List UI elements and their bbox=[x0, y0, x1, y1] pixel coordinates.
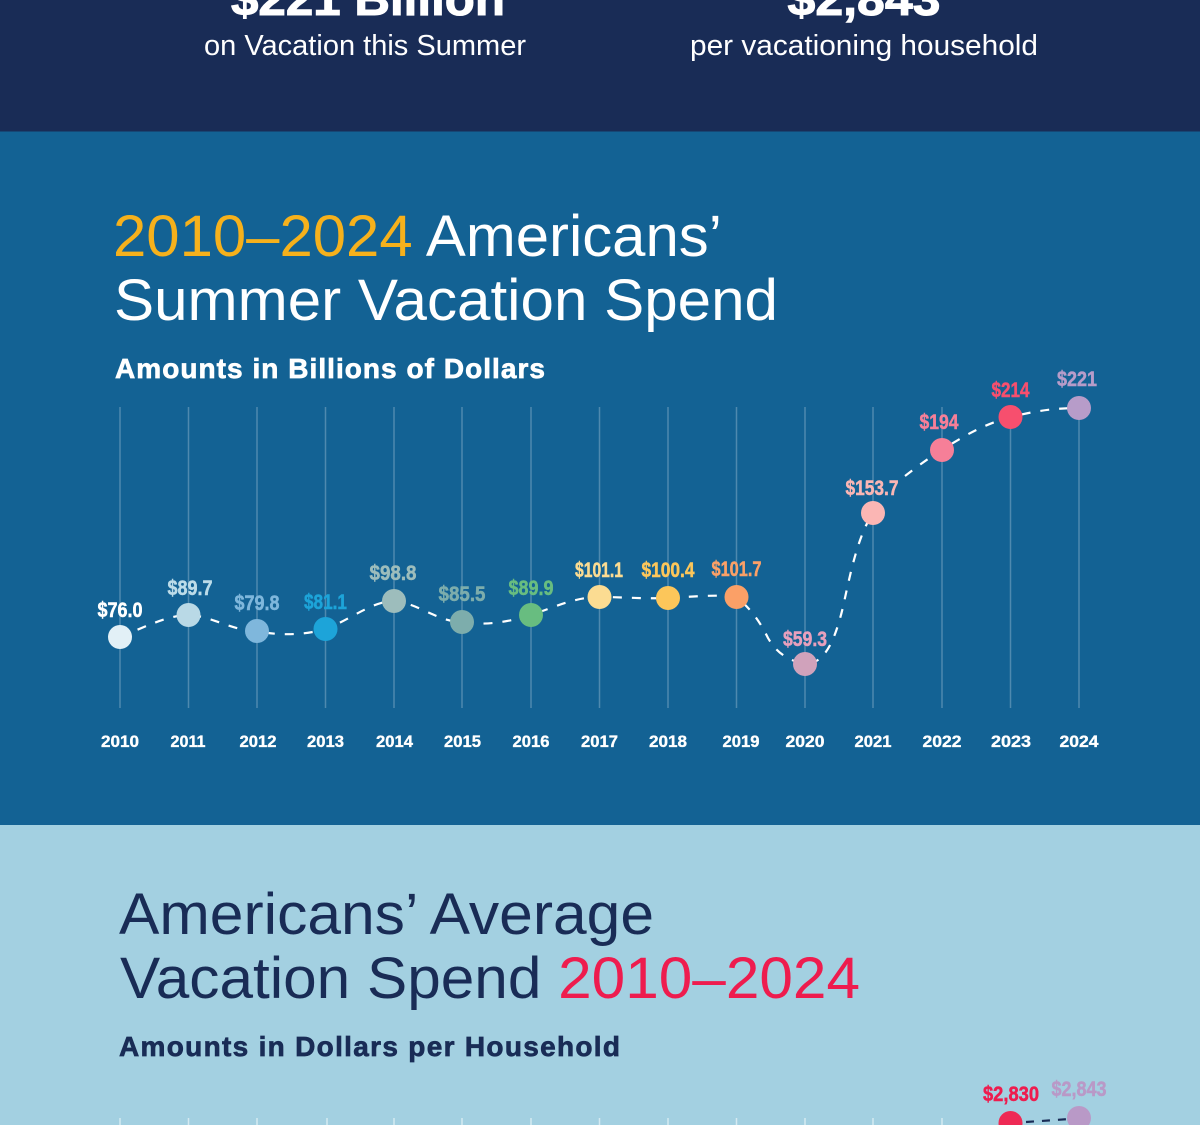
year axis labels: 2011 bbox=[170, 732, 206, 751]
heading: summer spend: Summer Vacation Spend bbox=[114, 268, 778, 333]
value labels: $98.8 bbox=[370, 562, 417, 585]
heading: average spend: Vacation Spend 2010–2024 bbox=[120, 946, 860, 1011]
year axis labels: 2012 bbox=[240, 732, 276, 751]
year axis labels: 2010 bbox=[101, 732, 139, 751]
data points bbox=[108, 396, 1091, 676]
value labels: $100.4 bbox=[642, 559, 695, 582]
year axis labels: 2023 bbox=[991, 732, 1031, 751]
year axis labels: 2017 bbox=[581, 732, 618, 751]
value labels: $81.1 bbox=[304, 591, 347, 614]
stat: spend per household: per vacationing household bbox=[690, 30, 1038, 62]
year axis labels: 2014 bbox=[376, 732, 414, 751]
dashed trend line bbox=[120, 408, 1079, 664]
value label: 2023: $2,830 bbox=[983, 1083, 1039, 1106]
value labels: $153.7 bbox=[846, 477, 898, 500]
value labels: $101.7 bbox=[712, 558, 762, 581]
line chart: household spend, cropped bbox=[120, 1078, 1106, 1125]
heading: average spend: Americans’ Average bbox=[119, 882, 654, 947]
year axis labels: 2016 bbox=[512, 732, 550, 751]
value labels: $89.7 bbox=[168, 577, 212, 600]
year axis labels: 2022 bbox=[922, 732, 962, 751]
line chart: summer spend bbox=[98, 368, 1099, 751]
value labels: $214 bbox=[992, 379, 1030, 402]
data point: 2024 bbox=[1067, 1106, 1091, 1125]
dashed trend line bbox=[1026, 1119, 1070, 1122]
value labels: $76.0 bbox=[98, 599, 142, 622]
data point: 2023 bbox=[998, 1111, 1022, 1125]
stat: total summer spend bbox=[204, 0, 526, 62]
heading: summer spend bbox=[113, 204, 778, 333]
year axis labels: 2018 bbox=[649, 732, 687, 751]
stat: spend per household bbox=[690, 0, 1038, 62]
heading: average spend bbox=[119, 882, 860, 1011]
value labels: $194 bbox=[920, 411, 959, 434]
stat: total summer spend: on Vacation this Summer bbox=[204, 30, 526, 62]
value labels: $85.5 bbox=[438, 583, 486, 606]
heading: summer spend: 2010–2024 Americans’ bbox=[113, 204, 722, 269]
year axis labels bbox=[101, 732, 1099, 751]
value labels: $89.9 bbox=[508, 577, 554, 600]
year axis labels: 2020 bbox=[786, 732, 824, 751]
value labels: $79.8 bbox=[234, 592, 280, 615]
panel: top totals band bbox=[0, 0, 1200, 132]
subheading: billions: Amounts in Billions of Dollars bbox=[115, 353, 545, 384]
year axis labels: 2024 bbox=[1060, 732, 1099, 751]
value labels: $221 bbox=[1057, 368, 1097, 391]
year axis labels: 2013 bbox=[307, 732, 344, 751]
subheading: per household: Amounts in Dollars per Household bbox=[119, 1031, 620, 1062]
value labels bbox=[98, 368, 1097, 651]
value label: 2024: $2,843 bbox=[1052, 1078, 1106, 1101]
year axis labels: 2019 bbox=[722, 732, 760, 751]
year axis labels: 2021 bbox=[854, 732, 892, 751]
panel: summer vacation spend chart bbox=[0, 132, 1200, 825]
panel: average vacation spend chart bbox=[0, 825, 1200, 1125]
year axis labels: 2015 bbox=[444, 732, 481, 751]
value labels: $101.1 bbox=[575, 559, 623, 582]
value labels: $59.3 bbox=[783, 628, 827, 651]
